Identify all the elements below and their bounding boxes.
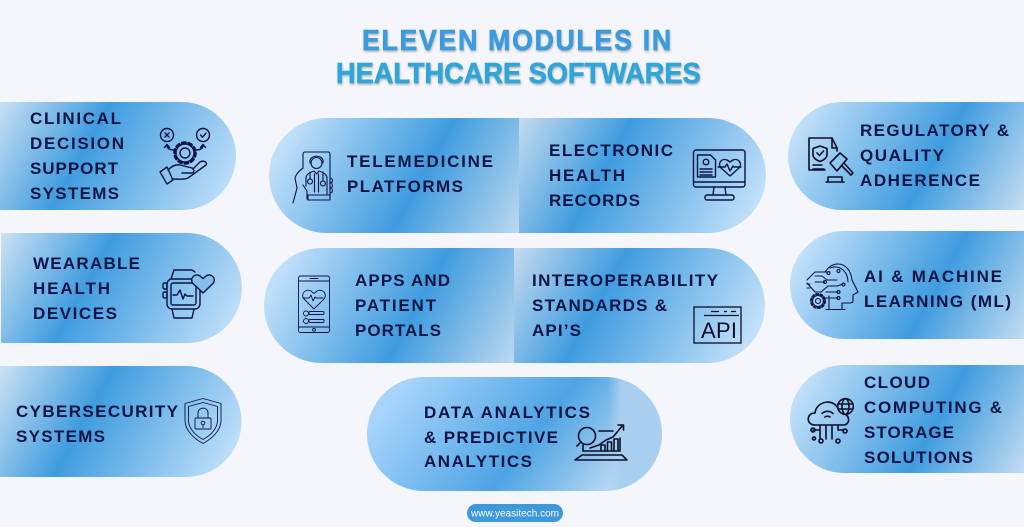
icon: document, shield and gavel (809, 138, 853, 182)
icon: API window (694, 307, 741, 343)
panel: wearable health devices (1, 233, 242, 343)
label: cloud computing and storage solutions (864, 373, 1002, 467)
label: regulatory and quality adherence: ADHERENCE (860, 171, 980, 190)
icon: smartwatch with heart (163, 270, 214, 318)
icon: cloud with globe and circuit (808, 399, 853, 443)
label: cybersecurity systems: SYSTEMS (16, 427, 105, 446)
label: AI and machine learning: LEARNING (ML) (864, 292, 1011, 311)
icon: hand holding gear (160, 128, 210, 184)
label: clinical decision support systems: SUPPORT (30, 159, 119, 178)
label: data analytics and predictive analytics (424, 403, 590, 471)
icon: magnifier and growth chart on laptop (575, 425, 627, 460)
label: electronic health records: HEALTH (549, 166, 625, 185)
label: AI and machine learning: AI & MACHINE (864, 267, 1002, 286)
label: interoperability standards and APIs (532, 271, 719, 340)
label: cloud computing and storage solutions: SOLUTIONS (864, 448, 973, 467)
label: interoperability standards and APIs: STANDARDS & (532, 296, 667, 315)
label: clinical decision support systems: DECISION (30, 134, 124, 153)
title (336, 24, 701, 89)
label: AI and machine learning (864, 267, 1011, 311)
label: regulatory and quality adherence: REGULATORY & (860, 121, 1009, 140)
title: ELEVEN MODULES IN (362, 24, 671, 56)
label: electronic health records (549, 141, 673, 210)
label: interoperability standards and APIs: INTEROPERABILITY (532, 271, 719, 290)
panel: data analytics and predictive analytics (367, 377, 662, 491)
panel: cybersecurity systems (0, 366, 242, 477)
icon: API window: API (701, 318, 737, 343)
label: interoperability standards and APIs: API’S (532, 321, 581, 340)
label: data analytics and predictive analytics: DATA ANALYTICS (424, 403, 590, 422)
label: clinical decision support systems (30, 109, 124, 203)
icon: doctor on phone in hand (293, 152, 332, 203)
label: regulatory and quality adherence: QUALITY (860, 146, 945, 165)
label: apps and patient portals (355, 271, 450, 340)
label: data analytics and predictive analytics: ANALYTICS (424, 452, 532, 471)
label: regulatory and quality adherence (860, 121, 1009, 190)
label: apps and patient portals: APPS AND (355, 271, 450, 290)
label: electronic health records: ELECTRONIC (549, 141, 673, 160)
panel: telemedicine platforms (269, 118, 519, 233)
label: wearable health devices (33, 254, 140, 323)
panel: clinical decision support systems (0, 102, 236, 210)
panel: AI and machine learning (790, 231, 1024, 339)
icon: phone with heart and list (298, 276, 330, 332)
footer website badge: www.yeasitech.com (470, 508, 559, 520)
label: electronic health records: RECORDS (549, 191, 640, 210)
panel: electronic health records (519, 118, 766, 233)
label: cloud computing and storage solutions: CLOUD (864, 373, 930, 392)
title: HEALTHCARE SOFTWARES (336, 57, 701, 89)
label: cybersecurity systems (16, 402, 179, 446)
label: cybersecurity systems: CYBERSECURITY (16, 402, 179, 421)
label: cloud computing and storage solutions: COMPUTING & (864, 398, 1002, 417)
label: clinical decision support systems: SYSTEMS (30, 184, 119, 203)
icon: AI head with circuit and gear (807, 264, 858, 310)
label: wearable health devices: DEVICES (33, 304, 117, 323)
label: cloud computing and storage solutions: STORAGE (864, 423, 954, 442)
label: telemedicine platforms (347, 152, 493, 196)
label: apps and patient portals: PORTALS (355, 321, 441, 340)
label: wearable health devices: WEARABLE (33, 254, 140, 273)
label: telemedicine platforms: PLATFORMS (347, 177, 463, 196)
icon: monitor with chart and heart (694, 150, 745, 200)
label: telemedicine platforms: TELEMEDICINE (347, 152, 493, 171)
label: data analytics and predictive analytics: & PREDICTIVE (424, 428, 558, 447)
label: apps and patient portals: PATIENT (355, 296, 437, 315)
panel: cloud computing and storage solutions (790, 365, 1024, 473)
footer website badge (467, 504, 563, 522)
label: clinical decision support systems: CLINICAL (30, 109, 121, 128)
label: wearable health devices: HEALTH (33, 279, 110, 298)
panel: interoperability standards and APIs (514, 248, 765, 363)
panel: regulatory and quality adherence (788, 102, 1024, 210)
panel: apps and patient portals (264, 248, 514, 363)
icon: security shield with padlock (185, 398, 221, 444)
